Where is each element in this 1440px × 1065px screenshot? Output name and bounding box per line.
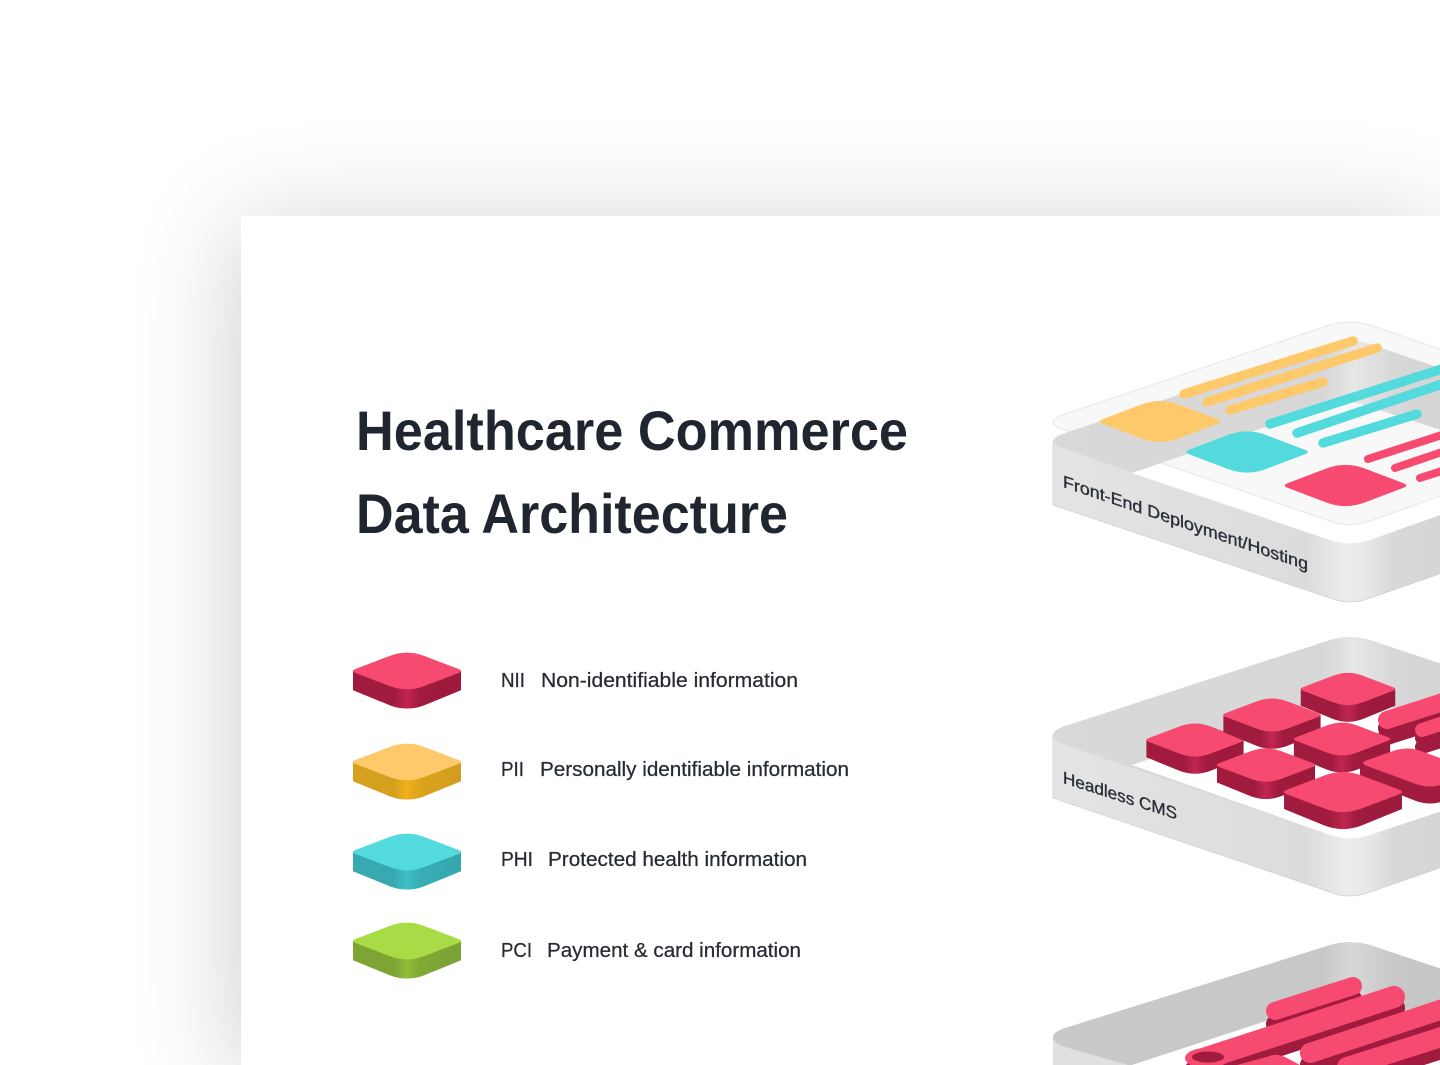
panel: headless CMS layer bbox=[1053, 637, 1440, 896]
legend row: NII bbox=[353, 653, 798, 709]
module long bar with port bbox=[1185, 997, 1394, 1065]
platform top surface bbox=[1053, 637, 1440, 838]
module bar 3 bbox=[1310, 1000, 1440, 1065]
module bar I bbox=[1422, 716, 1440, 747]
red content card bbox=[1285, 465, 1406, 506]
legend row: PCI: PCI bbox=[501, 940, 532, 962]
title: Healthcare Commerce bbox=[356, 399, 908, 462]
module block G bbox=[1360, 748, 1440, 804]
module bar 4 bbox=[1347, 1028, 1440, 1065]
icon: green tile bbox=[353, 923, 461, 979]
teal text lines bbox=[1270, 368, 1440, 443]
orange content card bbox=[1100, 401, 1220, 442]
legend row: PCI: Payment & card information bbox=[547, 940, 801, 962]
teal content card bbox=[1186, 431, 1308, 473]
platform top surface bbox=[1053, 942, 1440, 1065]
module block C bbox=[1301, 673, 1395, 722]
legend row: PII bbox=[353, 744, 849, 800]
module block B bbox=[1223, 698, 1321, 749]
legend row: NII: Non-identifiable information bbox=[541, 670, 798, 692]
legend row: PCI bbox=[353, 923, 801, 979]
module bar H bbox=[1387, 695, 1440, 736]
panel: third layer bbox=[1053, 942, 1440, 1065]
label: headless CMS: Headless CMS bbox=[1063, 767, 1177, 823]
icon: teal tile bbox=[353, 834, 461, 890]
inner tray bbox=[1132, 402, 1440, 544]
inner tray bbox=[1132, 695, 1440, 838]
module block fragment bbox=[1237, 1055, 1300, 1065]
legend row: PHI: Protected health information bbox=[548, 849, 807, 871]
platform wall bbox=[1053, 1037, 1440, 1065]
icon: red tile bbox=[353, 653, 461, 709]
red text lines bbox=[1368, 434, 1440, 478]
inner tray bbox=[1132, 997, 1440, 1065]
title: Data Architecture bbox=[356, 482, 788, 545]
panel: front-end deployment layer bbox=[1053, 322, 1440, 602]
platform top surface bbox=[1053, 341, 1440, 544]
module block D bbox=[1217, 748, 1315, 799]
legend row: PHI bbox=[353, 834, 807, 890]
legend row: PII: Personally identifiable information bbox=[540, 759, 849, 781]
legend bbox=[353, 653, 849, 979]
legend row: PHI: PHI bbox=[501, 849, 533, 871]
white card with soft shadow bbox=[241, 216, 1440, 1065]
platform wall bbox=[1053, 440, 1440, 602]
legend row: PII: PII bbox=[501, 759, 524, 781]
translucent top plate bbox=[1053, 322, 1440, 524]
orange text lines bbox=[1184, 341, 1377, 410]
module bar 1 bbox=[1275, 986, 1353, 1024]
platform wall bbox=[1053, 735, 1440, 896]
icon: orange tile bbox=[353, 744, 461, 800]
title bbox=[356, 399, 908, 545]
module block E bbox=[1294, 723, 1390, 772]
module block F bbox=[1284, 772, 1402, 829]
label: front-end: Front-End Deployment/Hosting bbox=[1063, 471, 1308, 574]
module block A bbox=[1146, 723, 1244, 774]
legend row: NII: NII bbox=[501, 670, 525, 692]
